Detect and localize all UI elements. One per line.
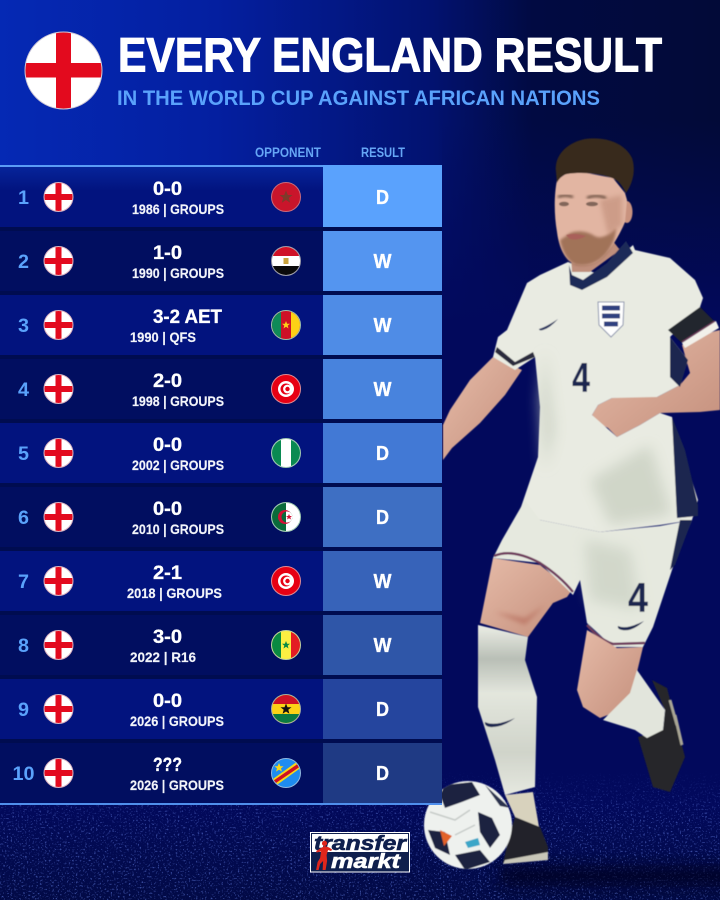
row 3: 1990 | QFS [130, 330, 196, 345]
logo: transfermarkt [310, 832, 410, 873]
sock swoosh [485, 718, 515, 727]
row 10: 2026 | GROUPS [130, 778, 224, 793]
row 7: 2018 | GROUPS [127, 586, 222, 601]
raised boot [638, 680, 685, 792]
face [555, 173, 627, 265]
collar [569, 241, 633, 290]
standing leg [480, 558, 572, 637]
shorts stripes [494, 553, 645, 644]
shirt swoosh [539, 319, 558, 330]
shorts shading [585, 540, 640, 610]
shorts number 4: 4 [628, 574, 649, 621]
shirt side panel [670, 337, 698, 518]
column header: result: RESULT [361, 145, 406, 160]
row 7: W [374, 571, 392, 593]
row 6: 0-0 [153, 499, 182, 520]
shorts [493, 500, 692, 647]
player shirt [493, 245, 703, 532]
row 7: 2-1 [153, 563, 182, 584]
row 1: 0-0 [153, 179, 182, 200]
player: Declan Rice [424, 138, 720, 870]
row 3: 3 [18, 316, 29, 337]
row 10: D [376, 763, 389, 785]
row 4: 1998 | GROUPS [132, 394, 224, 409]
sleeve band left [495, 347, 535, 366]
football [424, 781, 512, 870]
title: EVERY ENGLAND RESULT [118, 30, 662, 82]
row 1: D [376, 187, 389, 209]
logo: transfermarkt: transfer [314, 832, 407, 855]
boot stripes [670, 700, 682, 745]
row 2: 1990 | GROUPS [132, 266, 224, 281]
row 7 [0, 551, 442, 611]
row 4: 2-0 [153, 371, 182, 392]
row 8: W [374, 635, 392, 657]
row 9: 9 [18, 700, 29, 721]
row 4 [0, 359, 442, 419]
row 2: 1-0 [153, 243, 182, 264]
player left arm [443, 357, 522, 460]
ear [622, 201, 632, 223]
row 2 [0, 231, 442, 291]
face shadow [600, 195, 622, 235]
table top rule [0, 165, 323, 167]
shorts swoosh [618, 621, 644, 630]
icon: large England flag [24, 30, 104, 110]
shorts side stripe [670, 520, 692, 570]
row 5: 5 [18, 444, 29, 465]
shirt number 4: 4 [572, 354, 590, 401]
row 10: 10 [12, 764, 34, 785]
subtitle: IN THE WORLD CUP AGAINST AFRICAN NATIONS [117, 86, 600, 110]
row 3 [0, 295, 442, 355]
row 1: 1 [18, 188, 29, 209]
raised sock [603, 670, 665, 738]
row 4: 4 [18, 380, 29, 401]
row 3: W [374, 315, 392, 337]
beard [560, 228, 616, 266]
results table [0, 165, 442, 805]
eyes and mouth [558, 196, 606, 240]
row 5: D [376, 443, 389, 465]
row 6: D [376, 507, 389, 529]
planted boot [503, 817, 548, 863]
row 3: 3-2 AET [153, 307, 222, 328]
row 2: W [374, 251, 392, 273]
row 10: ??? [153, 755, 182, 776]
row 8: 3-0 [153, 627, 182, 648]
row 6 [0, 487, 442, 547]
row 6: 6 [18, 508, 29, 529]
standing sock [478, 625, 537, 795]
player right arm and hand [592, 330, 720, 437]
row 7: 7 [18, 572, 29, 593]
raised leg [577, 630, 643, 718]
England crest [598, 302, 624, 337]
row 8: 8 [18, 636, 29, 657]
row 9: 0-0 [153, 691, 182, 712]
logo: transfermarkt: markt [331, 850, 401, 873]
row 8: 2022 | R16 [130, 650, 196, 665]
row 5: 2002 | GROUPS [132, 458, 224, 473]
row 5: 0-0 [153, 435, 182, 456]
table artefact: player fingertip strip [403, 484, 435, 486]
row 9: 2026 | GROUPS [130, 714, 224, 729]
row 4: W [374, 379, 392, 401]
row 8 [0, 615, 442, 675]
knee shadow [495, 605, 545, 625]
column header: opponent: OPPONENT [255, 145, 322, 160]
row 1: 1986 | GROUPS [132, 202, 224, 217]
armband [668, 307, 719, 348]
hair [556, 138, 634, 193]
ankle sock [505, 792, 539, 827]
boot sole [503, 852, 548, 864]
row 6: 2010 | GROUPS [132, 522, 224, 537]
shirt shading [540, 350, 672, 525]
neck [570, 240, 620, 272]
row 1 [0, 165, 442, 227]
row 9 [0, 679, 442, 739]
row 10 [0, 743, 442, 803]
row 2: 2 [18, 252, 29, 273]
row 9: D [376, 699, 389, 721]
table bottom rule [0, 803, 442, 805]
row 5 [0, 423, 442, 483]
